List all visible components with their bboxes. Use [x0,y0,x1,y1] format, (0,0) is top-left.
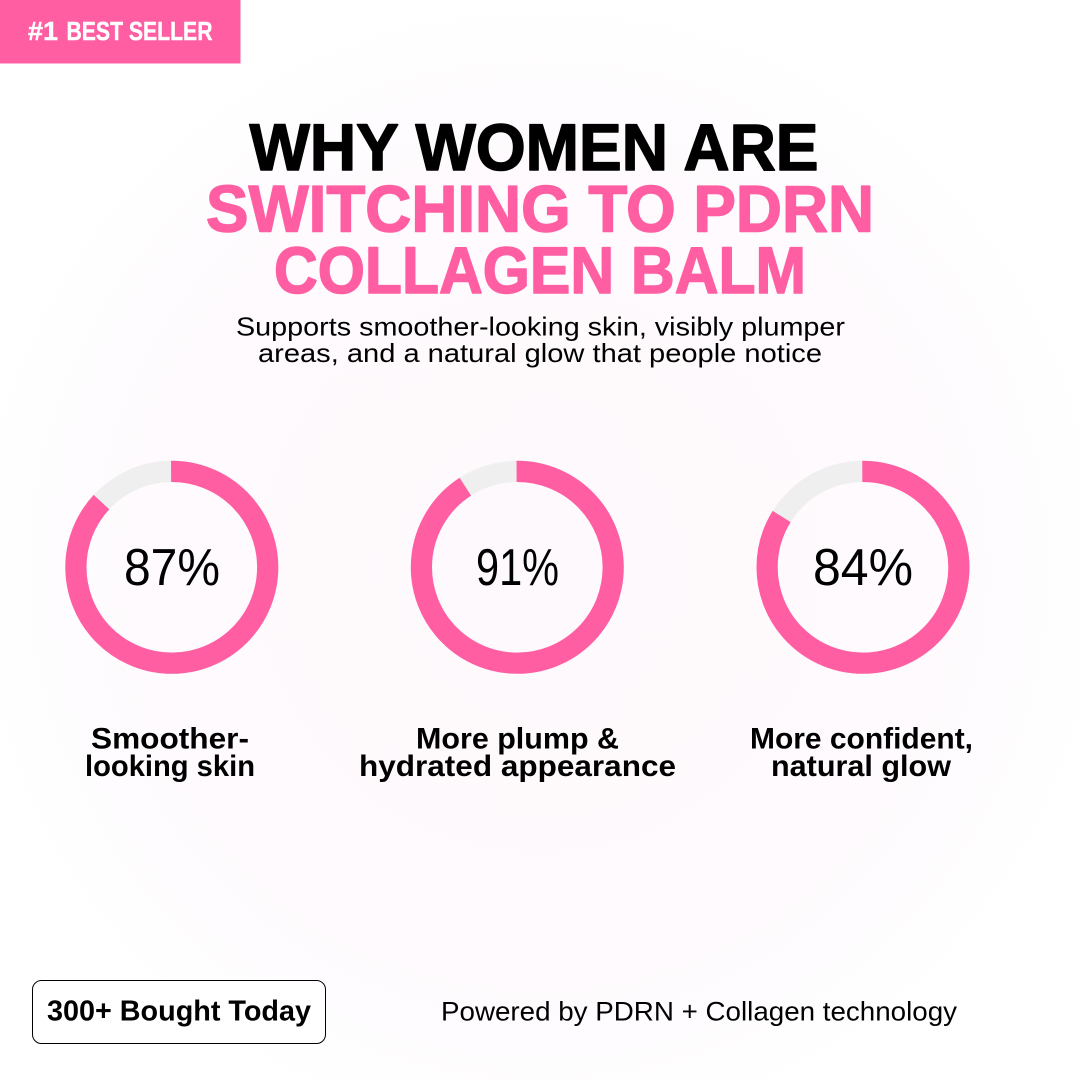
label: smoother-looking skin: looking skin [85,750,255,783]
badge: #1 best seller [0,0,240,64]
label: more confident natural glow [750,722,973,783]
donut chart: 84%: 84% [813,539,913,597]
donut chart: 84% [767,471,959,663]
label: more plump and hydrated appearance: More plump & [416,722,619,756]
subtitle [236,312,845,368]
badge: 300+ bought today [32,980,326,1044]
subtitle: Supports smoother-looking skin, visibly plumper [236,312,845,342]
donut chart: 87%: 87% [124,539,220,597]
stat: 91% more plump and hydrated [359,471,676,783]
title: SWITCHING TO PDRN [206,172,874,246]
label: more plump and hydrated appearance [359,722,676,783]
badge: #1 best seller: BEST SELLER [66,16,213,46]
badge: 300+ bought today: 300+ Bought Today [47,996,311,1028]
donut chart: 91% [421,471,613,663]
title: WHY WOMEN ARE [250,110,818,184]
subtitle: areas, and a natural glow that people notice [258,338,822,368]
donut chart: 87% [76,471,268,663]
title [206,110,874,307]
label: smoother-looking skin: Smoother- [91,722,249,756]
footer note: Powered by PDRN + Collagen technology [441,996,958,1026]
label: more confident natural glow: natural glow [771,750,952,783]
stat: 84% more confident natural glow [750,471,973,783]
donut chart: 91%: 91% [476,539,559,597]
label: more confident natural glow: More confident, [750,722,973,756]
badge: #1 best seller: #1 [28,16,58,46]
label: more plump and hydrated appearance: hydrated appearance [359,750,676,783]
title: COLLAGEN BALM [274,233,806,307]
label: smoother-looking skin [85,722,255,783]
stat: 87% smoother-looking skin [76,471,268,783]
